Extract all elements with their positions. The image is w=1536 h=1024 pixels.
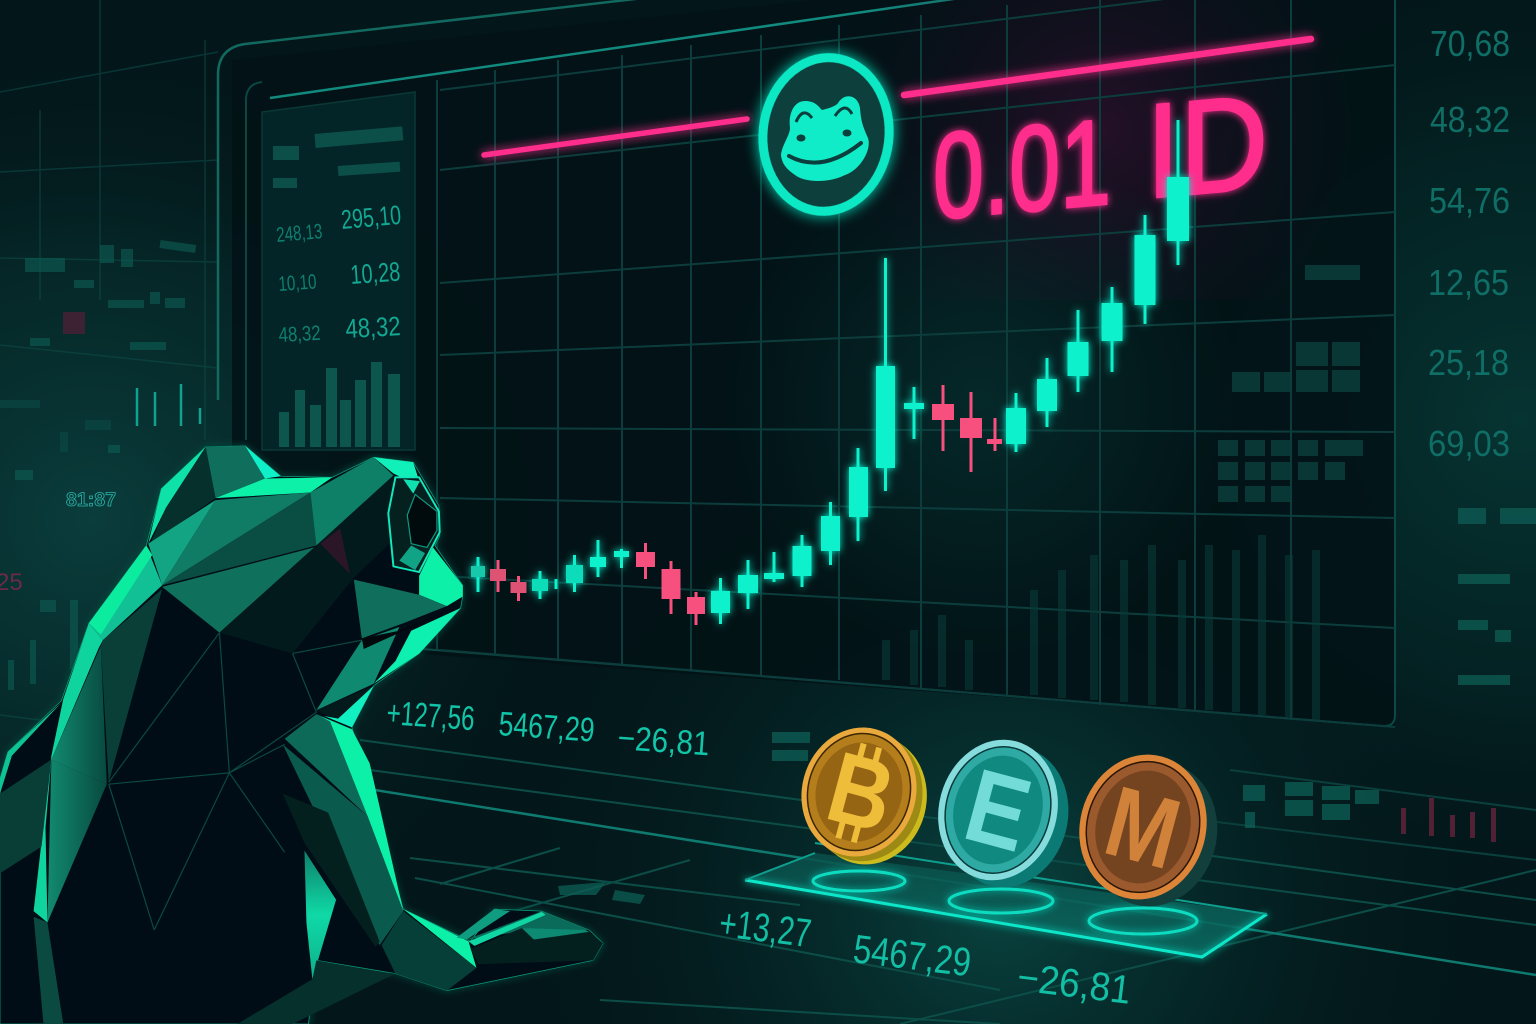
right axis numbers: 12,65 (1428, 262, 1509, 303)
logo ring (755, 51, 897, 218)
panel numbers right: 10,28 (349, 257, 401, 290)
mid ticker numbers (385, 694, 711, 763)
right axis numbers (1428, 23, 1510, 464)
coin: bitcoin (786, 714, 942, 877)
mid ticker numbers: 5467,29 (497, 705, 596, 750)
frog eye (388, 477, 440, 572)
panel numbers left (275, 220, 323, 347)
candlestick chart (471, 120, 1189, 625)
coin base rings (813, 871, 1197, 934)
right side dim blocks (1458, 508, 1536, 685)
panel numbers left: 48,32 (278, 322, 321, 347)
dim volume bars under chart (882, 535, 1320, 720)
head facets (148, 446, 421, 653)
monitor frame (218, 0, 1395, 726)
frog back and side (0, 546, 162, 1024)
coin: E (922, 726, 1085, 901)
price line right (904, 39, 1311, 95)
floor dim red bars (1401, 798, 1496, 842)
floor dim blocks (558, 732, 1379, 904)
mid ticker numbers: +127,56 (385, 694, 476, 738)
panel numbers left: 10,10 (278, 270, 317, 296)
letter M: M (1094, 765, 1191, 891)
panel volume bars (279, 362, 400, 447)
bottom ticker numbers: −26,81 (1015, 955, 1133, 1013)
coin platform (745, 843, 1267, 957)
right axis numbers: 54,76 (1429, 180, 1510, 221)
letter E: E (954, 747, 1042, 875)
frog arm and hand (237, 714, 603, 1024)
bearish candles (490, 385, 1002, 625)
glow behind candles (680, 130, 1280, 650)
chart panel fill (232, 0, 1395, 726)
bullish candles (471, 120, 1189, 624)
left background grid (0, 0, 218, 735)
bottom ticker numbers: +13,27 (717, 901, 814, 956)
coin: M (1062, 740, 1234, 921)
low-poly frog (0, 446, 603, 1024)
bottom ticker numbers: 5467,29 (851, 927, 973, 985)
panel numbers right: 48,32 (345, 311, 401, 344)
right axis numbers: 48,32 (1430, 99, 1510, 140)
price label: 0.01 (933, 93, 1111, 245)
price label: ID (1146, 67, 1268, 227)
chart grid (437, 0, 1395, 727)
left dim ticker blocks (0, 240, 200, 690)
pink glow behind price (780, 0, 1400, 300)
bottom ticker numbers (717, 901, 1133, 1013)
right axis numbers: 25,18 (1428, 342, 1509, 383)
price line left (484, 119, 747, 155)
bitcoin symbol: B (816, 730, 905, 855)
frog silhouette (0, 446, 603, 1024)
logo frog face (781, 96, 869, 181)
left ticker text: 81:87 (66, 490, 116, 511)
floor grid (360, 740, 1536, 1024)
frog body wire lines (109, 633, 362, 930)
panel numbers left: 248,13 (275, 220, 323, 247)
panel numbers right (340, 200, 402, 344)
right dim blocks (1218, 265, 1363, 502)
panel background (262, 92, 415, 450)
side data panel (262, 92, 415, 450)
right axis numbers: 69,03 (1428, 423, 1510, 464)
panel header blocks (273, 126, 403, 188)
frog coin logo (755, 51, 897, 218)
right axis numbers: 70,68 (1430, 23, 1510, 64)
panel numbers right: 295,10 (340, 200, 402, 235)
frog snout and jaw (316, 547, 463, 727)
price label (933, 67, 1268, 245)
mid ticker numbers: −26,81 (616, 719, 711, 763)
